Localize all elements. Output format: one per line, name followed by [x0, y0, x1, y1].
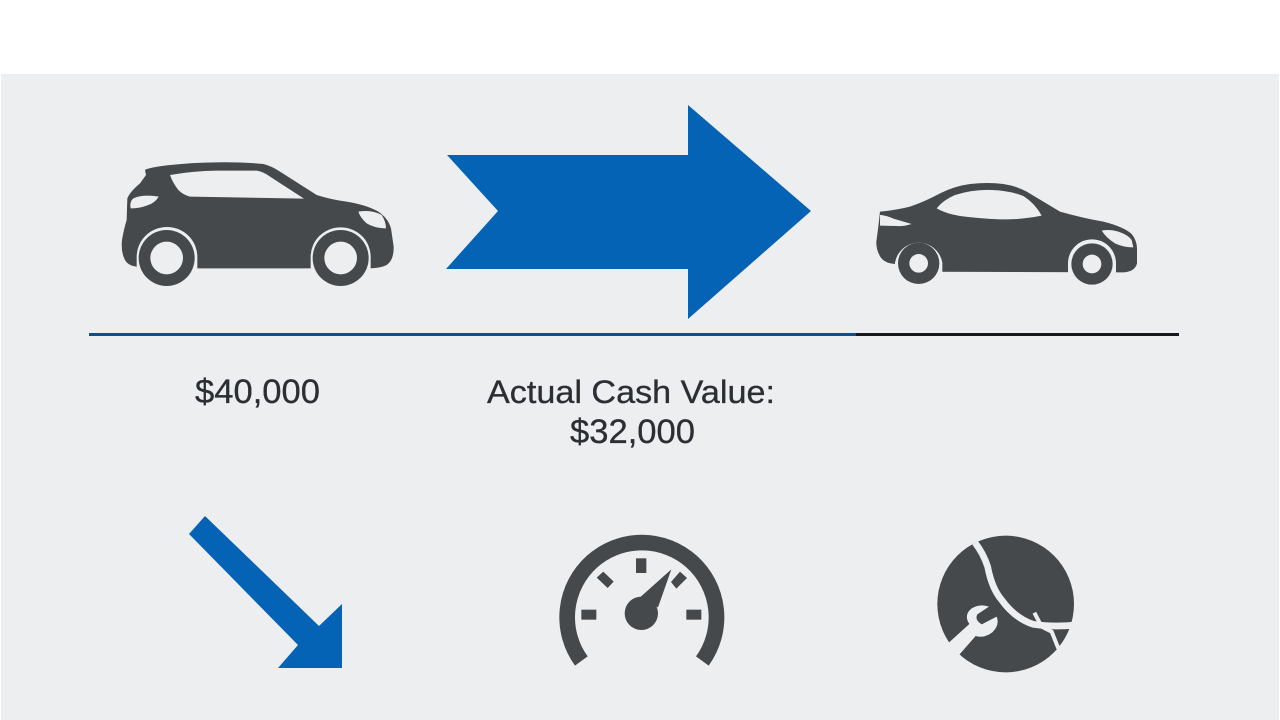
icon: new hatchback car: [122, 162, 394, 286]
label: original price: $40,000: [195, 373, 320, 411]
icon: speedometer: [567, 543, 716, 661]
wheel: rear: [895, 243, 942, 284]
wheel: front: [311, 227, 371, 286]
arrow: large blue depreciation arrow: [446, 105, 811, 319]
divider line: [89, 333, 1179, 336]
label: actual cash value: $32,000: [570, 413, 695, 451]
label: actual cash value: [487, 374, 775, 451]
wheel: front: [1068, 239, 1116, 285]
icon: blue down-right arrow: [189, 516, 342, 668]
icon: depreciated sedan car: [876, 183, 1137, 285]
icon: damaged wheel with wrench: [937, 536, 1077, 672]
label: actual cash value: Actual Cash Value:: [487, 374, 775, 410]
wheel: rear: [137, 227, 197, 286]
